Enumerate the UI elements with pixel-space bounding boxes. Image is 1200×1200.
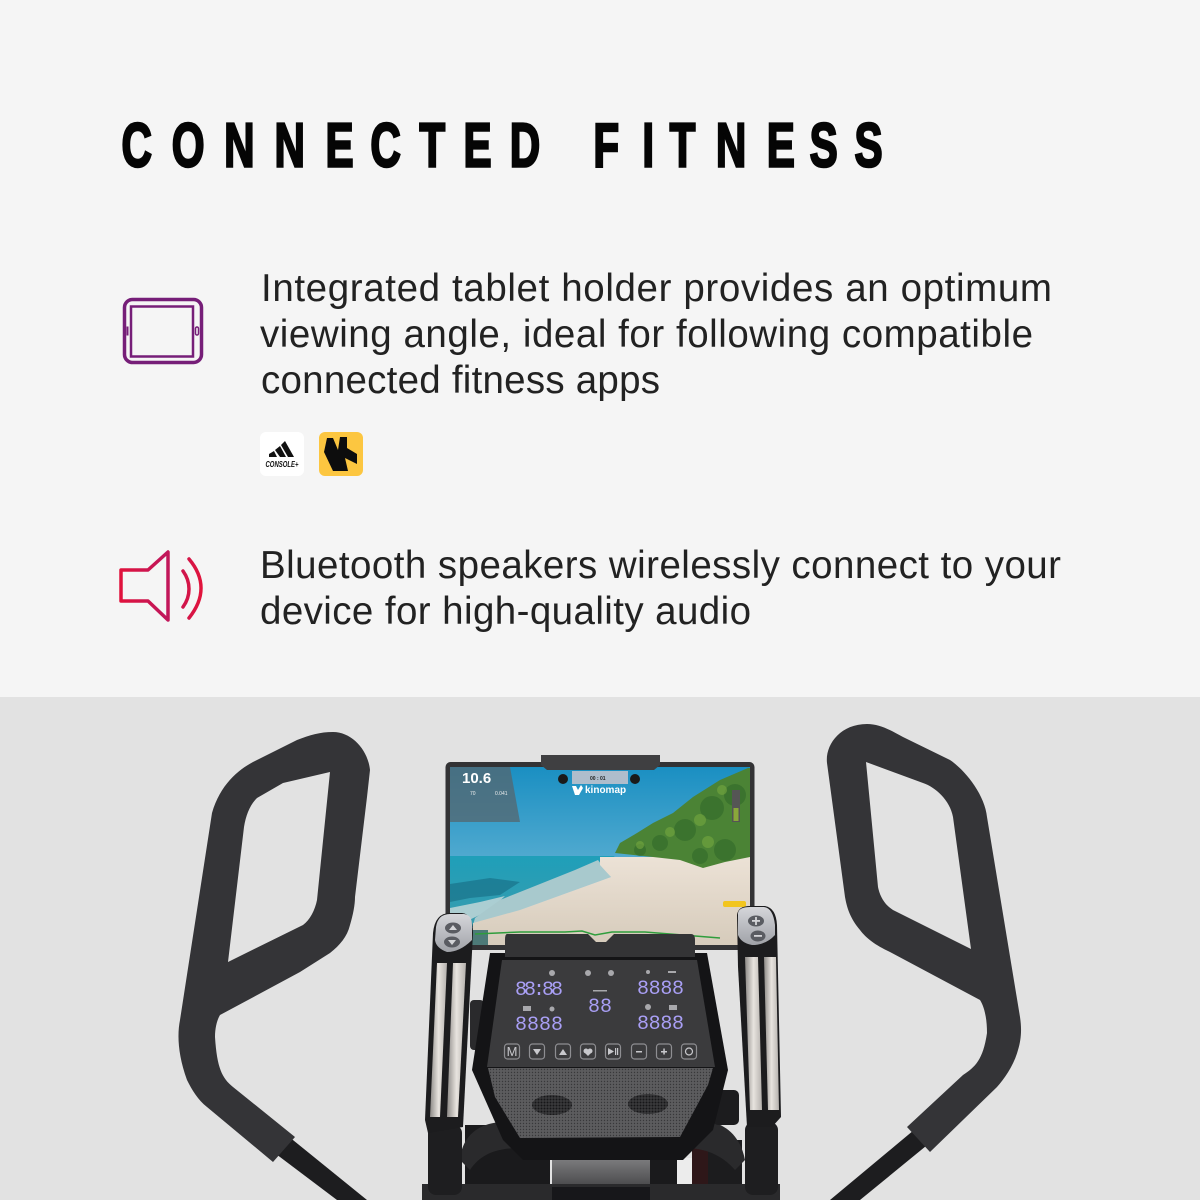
text: bluetooth description: device for high-quality audio — [260, 590, 751, 633]
tablet screen: beach video: kinomap — [585, 785, 626, 796]
lower frame — [422, 1000, 780, 1200]
product photo: elliptical console — [178, 724, 1021, 1200]
LED displays: 8888 — [637, 1013, 684, 1036]
LED displays: 8888 — [637, 978, 684, 1001]
console body — [472, 934, 728, 1160]
tablet clamp — [541, 755, 660, 770]
left handlebar — [178, 732, 370, 1200]
speaker port: right — [628, 1094, 668, 1114]
tablet shelf — [505, 934, 695, 957]
LED displays: 88:88 — [515, 979, 563, 1002]
text: tablet holder description — [260, 267, 1052, 402]
tablet screen: beach video: 10.6 — [462, 770, 491, 787]
tablet — [446, 755, 754, 950]
icon: speaker — [121, 552, 201, 620]
tablet screen: beach video — [450, 767, 750, 945]
console button glyphs — [507, 1044, 692, 1059]
icon: adidas console+ app — [260, 432, 304, 476]
background: lower product panel — [0, 697, 1200, 1200]
console indicator icons — [523, 970, 677, 1012]
right handlebar — [827, 724, 1021, 1200]
text: tablet holder description: connected fitness apps — [261, 359, 660, 402]
speaker port: left — [532, 1095, 572, 1115]
left control grip — [425, 913, 473, 1133]
text: tablet holder description: viewing angle, ideal for following compatible — [260, 313, 1033, 356]
console display panel — [487, 960, 715, 1067]
text: tablet holder description: Integrated tablet holder provides an optimum — [261, 267, 1052, 310]
tablet screen: beach video: 00 : 01 — [590, 776, 606, 782]
console buttons — [504, 1044, 696, 1059]
LED displays: 88 — [588, 996, 612, 1019]
feature: tablet holder — [124, 267, 1052, 476]
LED displays: 8888 — [515, 1014, 563, 1037]
console button glyphs: M — [507, 1044, 517, 1059]
text: bluetooth description: Bluetooth speakers wirelessly connect to your — [260, 544, 1061, 587]
tablet screen: beach video: 0.041 — [495, 791, 508, 797]
icon: adidas console+ app: CONSOLE+ — [266, 460, 299, 469]
icon: tablet — [124, 300, 202, 362]
background: upper panel — [0, 0, 1200, 697]
tablet frame — [446, 762, 754, 950]
tablet screen: beach video: 70 — [470, 791, 476, 797]
speaker grille — [488, 1068, 713, 1138]
feature: bluetooth speakers — [121, 544, 1061, 633]
right control grip — [737, 906, 781, 1127]
title: CONNECTED FITNESS — [122, 112, 883, 181]
LED displays — [515, 978, 684, 1037]
text: bluetooth description — [260, 544, 1061, 633]
icon: kinomap app — [319, 432, 363, 476]
